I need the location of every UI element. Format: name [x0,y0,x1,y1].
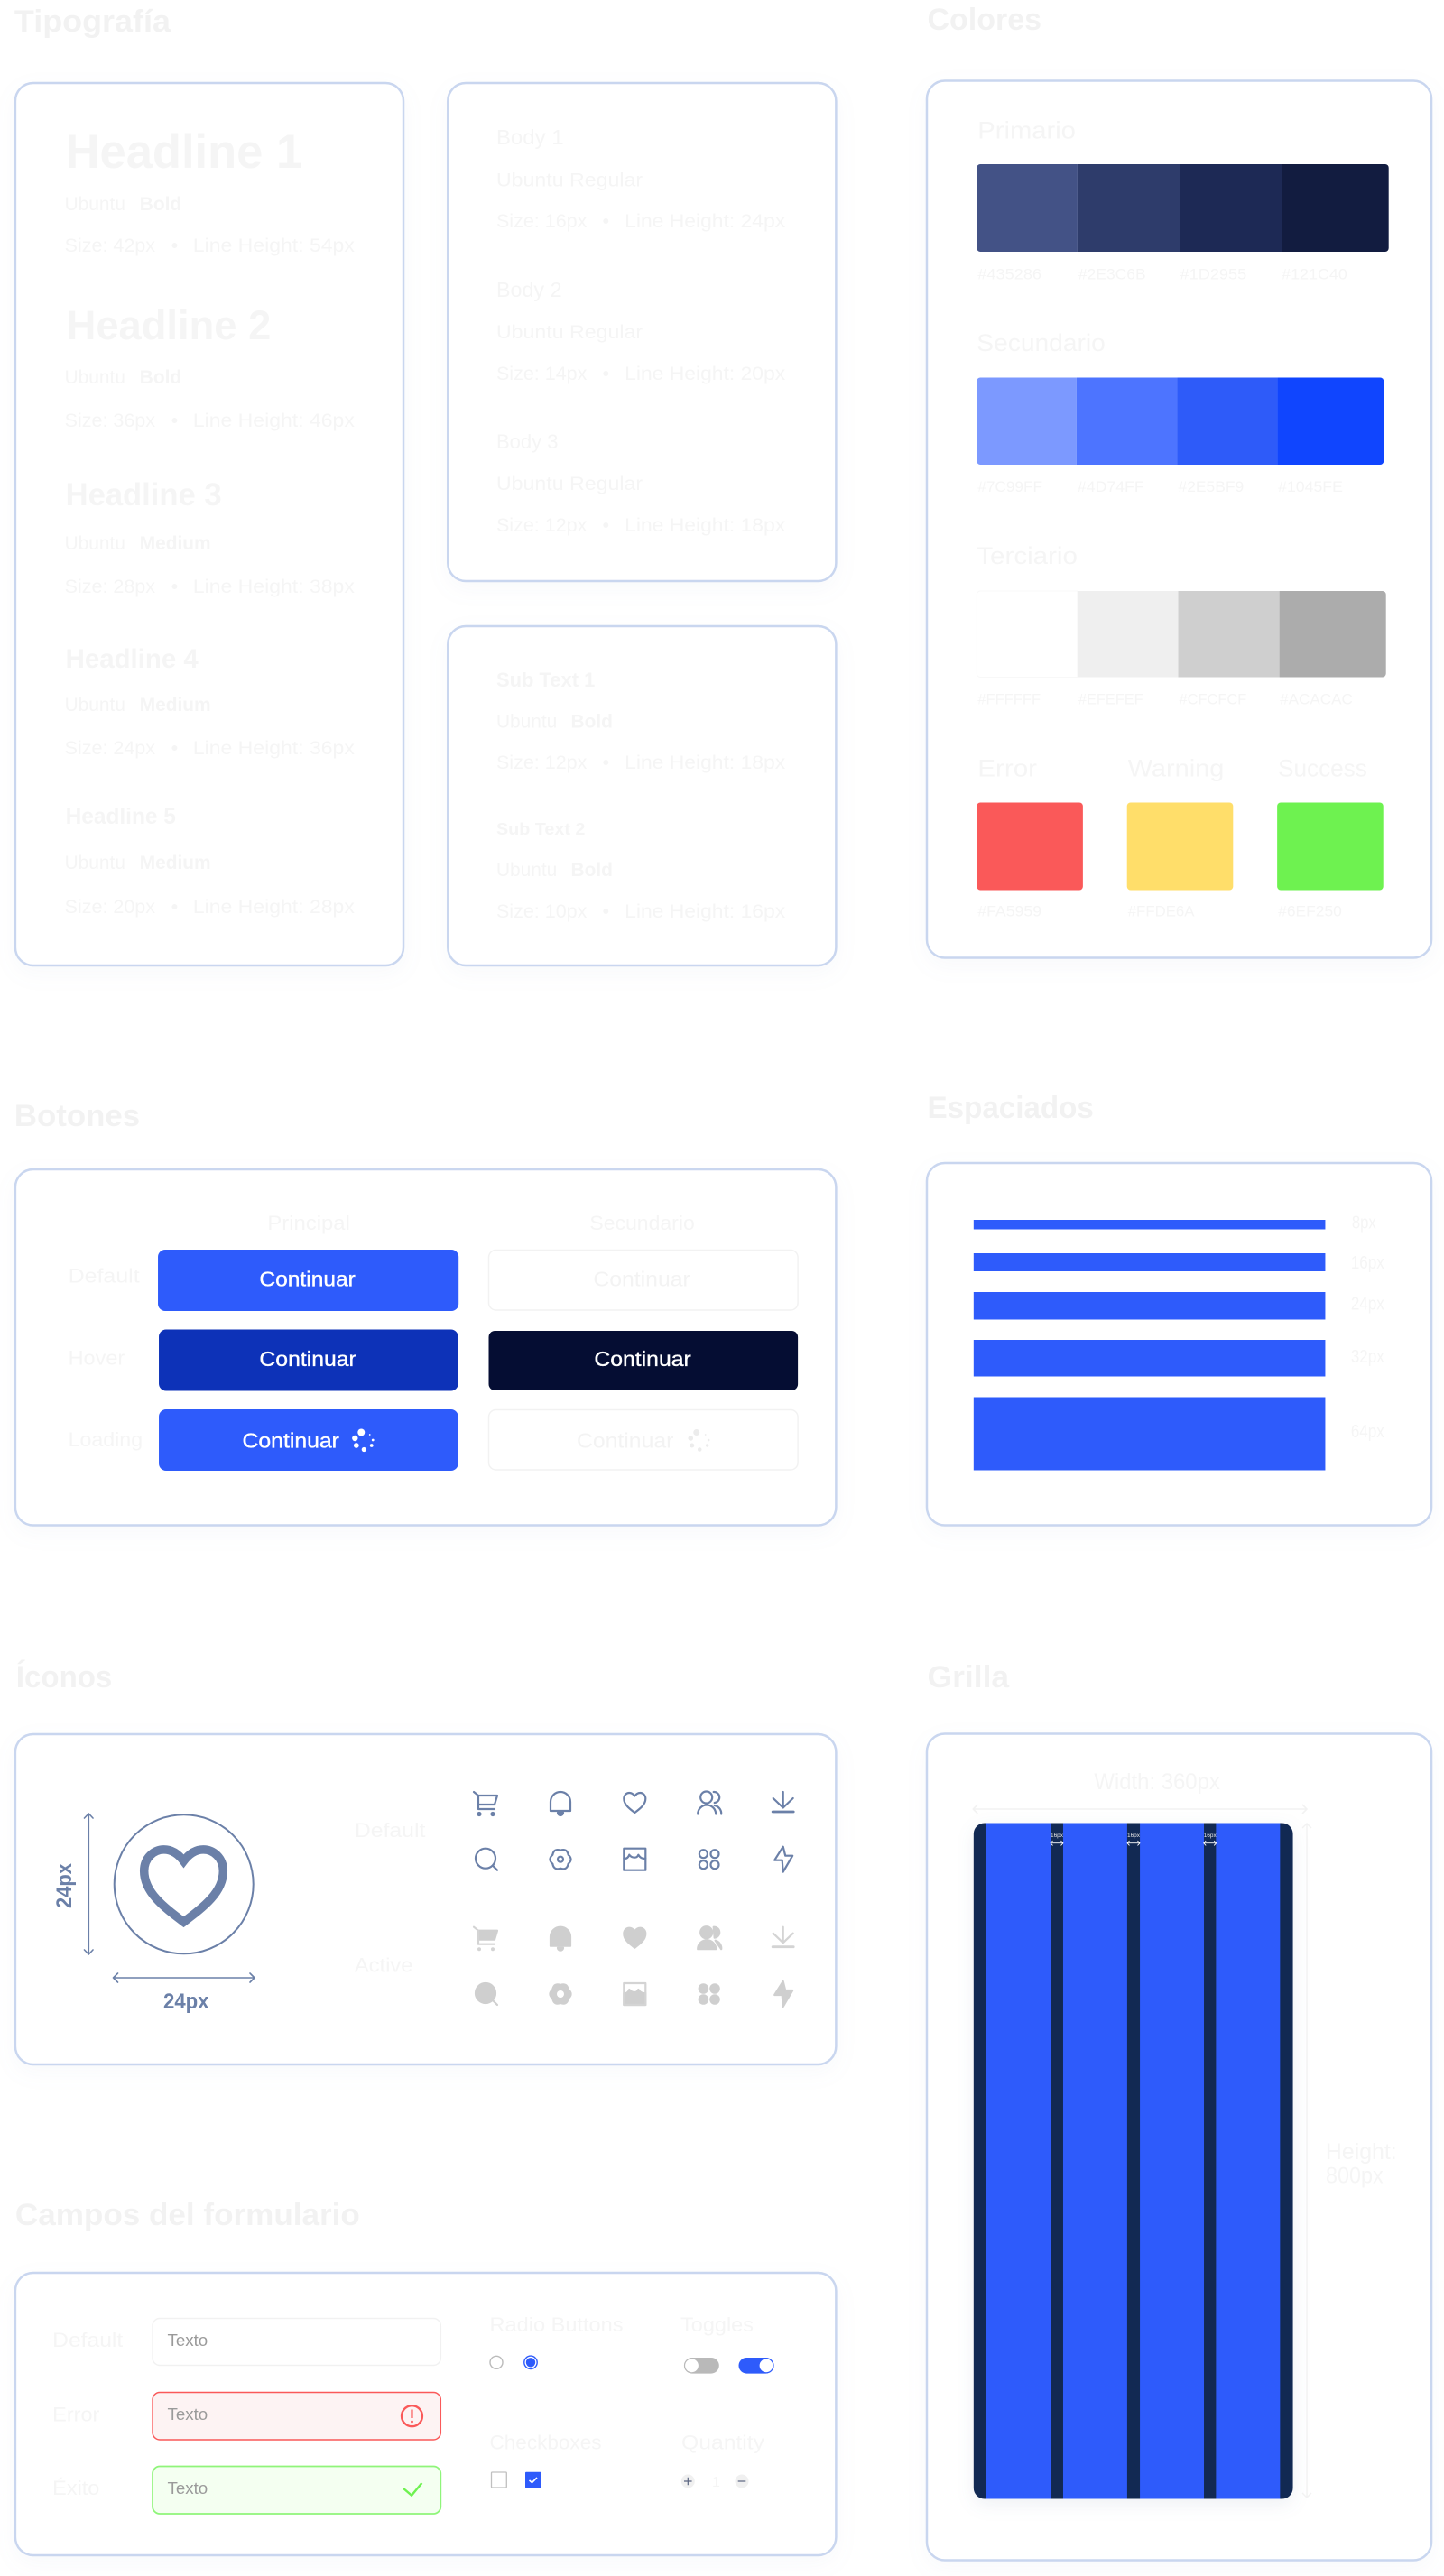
group: toggles [680,2313,774,2374]
spacing bar: 64px: 64px [1351,1422,1384,1442]
text block: body 2: Line Height: 20px [625,364,786,384]
label: width: Width: 360px [1094,1769,1220,1795]
text block: headline 5: Medium [140,853,211,873]
panel: campos del formulario [15,2273,836,2555]
button: secondary loading [489,1409,798,1470]
panel: botones [15,1169,836,1525]
text block: headline 5: Line Height: 28px [193,897,355,918]
panel: grilla [927,1734,1431,2561]
gutter label 1 [1051,1833,1064,1845]
label: active: Active [355,1953,412,1977]
text block: body 1: Size: 16px [496,211,588,232]
palette: primario: #1D2955 [1180,265,1246,283]
icon: apps active [699,1983,720,2005]
group: quantity: Quantity [681,2431,764,2454]
text block: headline 1: Line Height: 54px [193,235,355,256]
gutter label 1: 16px [1051,1833,1064,1839]
swatch: success: #6EF250 [1278,902,1342,920]
text block: body 3: Body 3 [496,430,559,453]
label: height: 800px [1326,2163,1384,2189]
row label: hover: Hover [69,1346,125,1370]
text block: headline 4: Medium [140,695,211,716]
text block: headline 5: Headline 5 [66,804,176,829]
palette: terciario: Terciario [977,542,1078,569]
text block: headline 5: Ubuntu [65,853,125,873]
text block: sub text 1 [496,669,786,773]
icon: settings [550,1850,571,1869]
spacing bar: 32px: 32px [1351,1347,1384,1367]
text block: sub text 1: Size: 12px [496,752,588,773]
panel: espaciados [927,1163,1431,1525]
group: radio buttons [489,2313,623,2369]
grid column 1 [986,1823,1051,2499]
swatch: warning: #FFDE6A [1128,902,1195,920]
text block: body 2: Body 2 [496,278,562,301]
grid mockup [974,1823,1293,2499]
text block: sub text 2: Bold [571,860,613,881]
text block: headline 3 [65,477,355,597]
swatch: warning [1127,754,1233,920]
button: primary default: Continuar [259,1267,356,1291]
palette: primario: Primario [977,116,1076,144]
text block: headline 3: Headline 3 [66,477,222,512]
text block: headline 4: Headline 4 [66,644,199,674]
label: vertical 24px: 24px [52,1862,77,1908]
group: quantity [681,2431,764,2490]
field row: default [52,2319,440,2366]
button: secondary default [489,1251,798,1310]
button: primary default [158,1250,458,1311]
grid column 2 [1063,1823,1127,2499]
field row: error: Error [52,2403,99,2426]
text block: sub text 2 [496,820,786,922]
field row: error [52,2393,440,2440]
text block: headline 1: Bold [140,194,181,215]
spacing bar: 24px: 24px [1351,1294,1384,1315]
text block: headline 2: Size: 36px [65,411,156,431]
swatch: error [977,754,1083,920]
panel: sub text [448,626,836,965]
grid column 4 [1216,1823,1280,2499]
column label: secundario: Secundario [589,1212,695,1234]
icon: error alert [402,2405,422,2426]
text block: body 2: Ubuntu Regular [496,322,643,343]
icon: cart [474,1792,497,1815]
icon: heart [624,1793,645,1813]
heading: Espaciados: Espaciados [927,1091,1094,1125]
button: primary hover: Continuar [259,1347,356,1371]
icon: spinner faded [688,1429,709,1452]
icon: search active [476,1983,497,2005]
text block: headline 2: Bold [140,367,181,388]
arrow: width [973,1805,1307,1814]
text block: sub text 2: Sub Text 2 [496,820,585,838]
text block: body 3: Line Height: 18px [625,515,786,536]
row label: loading: Loading [69,1428,143,1451]
text block: headline 1: Size: 42px [65,235,156,256]
heading: Campos del formulario: Campos del formulario [15,2198,360,2232]
field row: default: Texto [167,2331,208,2350]
spacing bar: 24px [974,1292,1384,1319]
field row: error: Texto [167,2405,208,2424]
text block: headline 2: Headline 2 [67,302,271,348]
spacing bar: 64px [974,1397,1384,1471]
label: height [1326,2139,1397,2189]
spacing bar: 16px [974,1253,1384,1273]
swatch: warning: Warning [1128,754,1224,782]
text block: body 2 [496,278,786,384]
icon: lightning active [774,1981,792,2007]
text block: body 3: Ubuntu Regular [496,474,643,494]
icon: cart active [474,1927,497,1951]
text block: body 3: Size: 12px [496,515,588,536]
text block: headline 1 [65,125,355,256]
palette: secundario: Secundario [977,329,1106,356]
text block: headline 3: Size: 28px [65,577,156,597]
icons: default set [474,1792,793,1872]
text block: headline 5: Size: 20px [65,897,156,918]
swatch: error: #FA5959 [977,902,1041,920]
text block: headline 4 [65,644,355,759]
text block: sub text 1: Ubuntu [496,711,557,733]
heading: Íconos: Íconos [16,1660,112,1694]
field row: éxito: Texto [167,2479,208,2498]
icon: bell active [551,1927,570,1951]
icon: search [476,1849,497,1870]
button: primary hover [159,1330,458,1391]
palette: terciario [977,542,1386,708]
text block: sub text 1: Bold [571,711,613,733]
palette: secundario [977,329,1384,495]
icon: success check [403,2483,421,2496]
text block: headline 1: Ubuntu [65,194,125,215]
heading: Grilla: Grilla [927,1660,1010,1694]
text block: body 2: Size: 14px [496,364,588,384]
panel: body text [448,83,836,581]
palette: primario: #121C40 [1282,265,1347,283]
text block: body 1: Body 1 [496,125,564,149]
icon: heart active [624,1928,645,1948]
button: secondary hover [489,1331,798,1390]
gutter label 3: 16px [1204,1833,1217,1839]
group: checkboxes [489,2431,601,2488]
button: primary loading: Continuar [243,1428,339,1453]
spacing bar: 8px: 8px [1352,1213,1376,1233]
field row: éxito: Éxito [52,2477,99,2499]
icon: spinner [352,1429,375,1452]
text block: headline 3: Ubuntu [65,533,125,554]
arrow: height [1302,1824,1311,2498]
text block: headline 5 [65,804,355,918]
palette: terciario: #EFEFEF [1078,690,1143,708]
text block: headline 2: Ubuntu [65,367,125,388]
text block: headline 2 [65,302,355,431]
palette: terciario: #CFCFCF [1180,690,1246,708]
spacing bar: 32px [974,1340,1384,1377]
grid column 3 [1140,1823,1204,2499]
icon anatomy [52,1814,255,2014]
heading: Botones: Botones [14,1099,140,1133]
button: secondary default: Continuar [593,1267,690,1291]
heading: Colores: Colores [927,3,1041,37]
icon: settings active [550,1984,571,2004]
palette: secundario: #1045FE [1278,478,1343,495]
button: secondary hover: Continuar [594,1347,691,1371]
text block: sub text 2: Size: 10px [496,901,588,922]
text block: sub text 1: Sub Text 1 [496,669,595,691]
spacing bar: 8px [974,1213,1376,1233]
palette: primario: #435286 [977,265,1041,283]
button: primary loading [159,1409,458,1471]
icon: lightning [774,1847,792,1872]
icon: download [773,1792,793,1812]
text block: sub text 2: Ubuntu [496,860,557,881]
text block: headline 4: Ubuntu [65,695,125,716]
palette: primario [977,116,1389,283]
label: default: Default [355,1819,425,1842]
panel: headlines [15,83,403,965]
palette: secundario: #2E5BF9 [1179,478,1244,495]
panel: iconos [15,1734,836,2064]
text block: body 3 [496,430,786,536]
icon: users active [698,1926,721,1949]
spacing bar: 16px: 16px [1351,1253,1384,1273]
group: quantity: 1 [712,2475,720,2490]
label: height: Height: [1326,2139,1397,2165]
text block: body 1: Line Height: 24px [625,211,786,232]
icon: users [698,1792,721,1814]
group: radio buttons: Radio Buttons [489,2313,623,2336]
text block: headline 3: Medium [140,533,211,554]
icon: circle keyline [115,1814,254,1953]
palette: terciario: #FFFFFF [977,690,1041,708]
panel: colores [927,81,1431,958]
icon: store [624,1849,645,1870]
column label: principal: Principal [267,1212,350,1234]
text block: sub text 1: Line Height: 18px [625,752,786,773]
icons: active set [474,1926,793,2007]
palette: secundario: #4D74FF [1078,478,1144,495]
swatch: success: Success [1278,754,1367,782]
text block: headline 4: Line Height: 36px [193,738,355,759]
text block: headline 1: Headline 1 [66,125,302,179]
swatch: success [1277,754,1384,920]
group: toggles: Toggles [680,2313,754,2336]
text block: headline 3: Line Height: 38px [193,577,355,597]
arrow: vertical dimension [85,1814,93,1954]
palette: terciario: #ACACAC [1280,690,1353,708]
palette: primario: #2E3C6B [1078,265,1146,283]
palette: secundario: #7C99FF [977,478,1042,495]
text block: body 1: Ubuntu Regular [496,170,643,191]
icon: store active [624,1983,645,2005]
label: horizontal 24px: 24px [163,1990,209,2014]
text block: body 1 [496,125,786,232]
icon: download active [773,1927,793,1947]
field row: éxito [52,2467,440,2514]
swatch: error: Error [977,754,1037,782]
heading: Tipografía: Tipografía [14,5,171,39]
button: secondary loading: Continuar [577,1428,674,1453]
arrow: horizontal dimension [114,1973,255,1982]
gutter label 3 [1204,1833,1217,1845]
icon: bell [551,1792,570,1815]
text block: headline 2: Line Height: 46px [193,411,355,431]
gutter label 2 [1127,1833,1141,1845]
field row: default: Default [52,2329,123,2351]
text block: sub text 2: Line Height: 16px [625,901,786,922]
text block: headline 4: Size: 24px [65,738,156,759]
group: checkboxes: Checkboxes [489,2431,601,2454]
row label: default: Default [69,1264,140,1288]
icon: large heart [144,1850,223,1922]
gutter label 2: 16px [1127,1833,1141,1839]
icon: apps [699,1850,718,1869]
